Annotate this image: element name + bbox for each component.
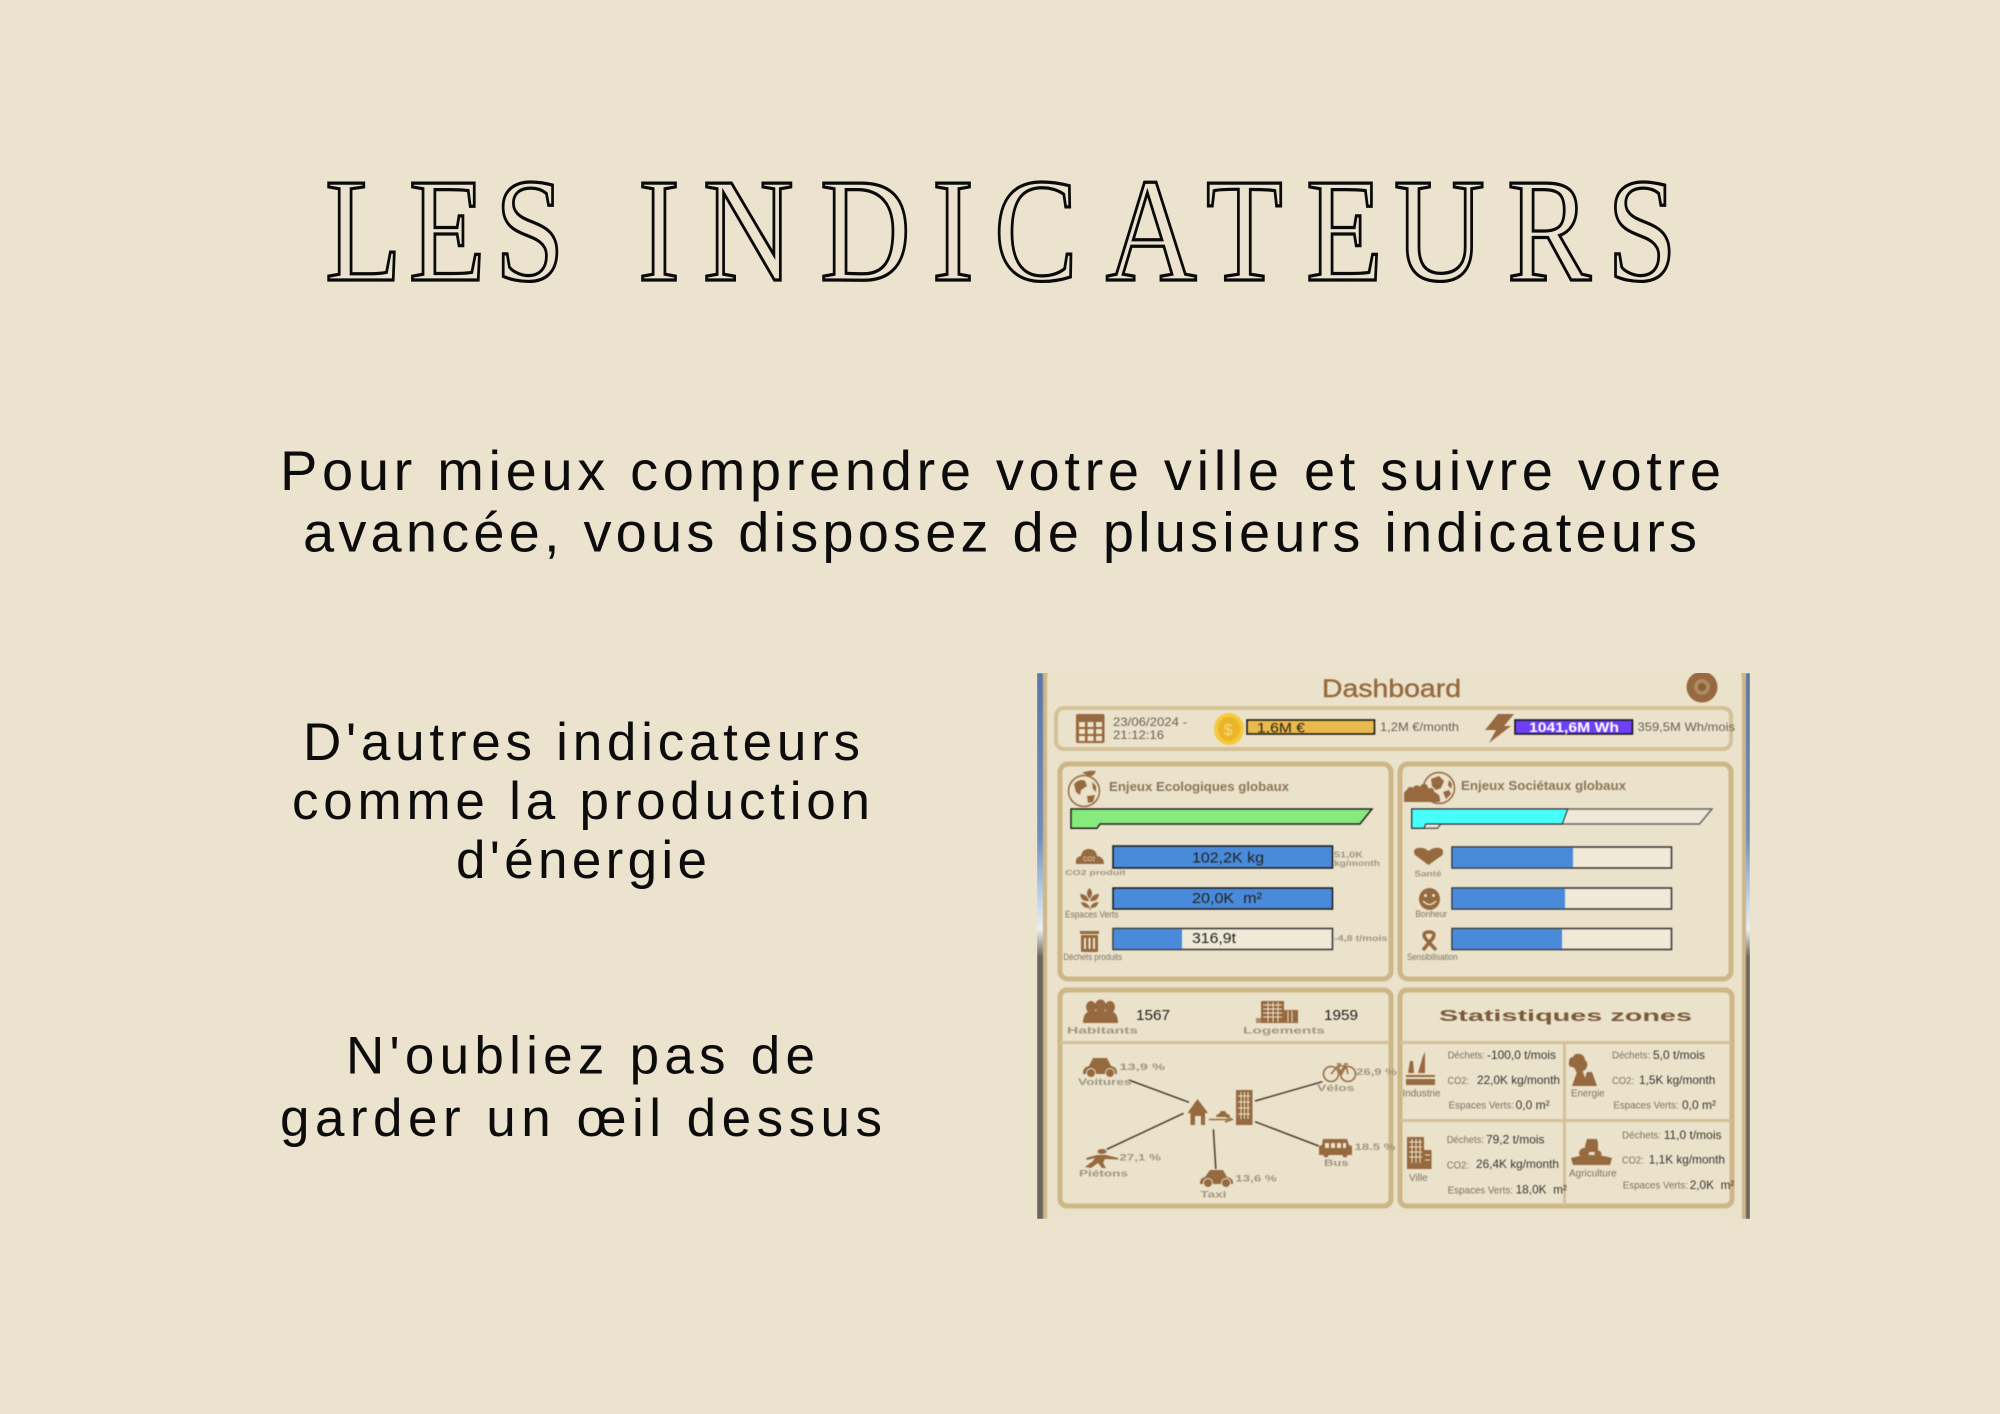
zone: industry: Industrie	[1402, 1089, 1441, 1100]
icon: calendar	[1076, 714, 1104, 743]
date and time	[1113, 716, 1187, 740]
mobility diagram	[1078, 1058, 1397, 1200]
monthly money: 1,2M €/month	[1380, 720, 1459, 734]
date and time: 23/06/2024 -	[1113, 715, 1187, 729]
mode: cars: 13,9 %	[1119, 1062, 1165, 1072]
mode: pedestrians	[1079, 1149, 1161, 1179]
zone: city: 26,4K kg/month	[1476, 1157, 1559, 1171]
bar: waste	[1113, 928, 1332, 950]
global gauge	[1071, 809, 1372, 828]
zone: energy: CO2:	[1612, 1076, 1634, 1087]
zone: agriculture: Déchets:	[1622, 1131, 1661, 1142]
money bar	[1247, 720, 1374, 736]
bar: waste: 316,9t	[1192, 930, 1237, 947]
dashboard screenshot	[1037, 660, 1750, 1219]
intro text: Pour mieux comprendre votre ville et suivre votre	[280, 439, 1721, 502]
icon: plant	[1080, 888, 1099, 910]
zone: industry	[1402, 1048, 1560, 1112]
zone: energy: 5,0 t/mois	[1653, 1048, 1705, 1062]
icon: trash	[1080, 931, 1099, 952]
zone: agriculture: Espaces Verts:	[1623, 1181, 1688, 1192]
zone: agriculture: 11,0 t/mois	[1664, 1128, 1722, 1142]
global gauge	[1412, 809, 1712, 828]
label: waste: Déchets produits	[1064, 952, 1122, 962]
zone: energy: Espaces Verts:	[1613, 1101, 1679, 1112]
icon: settings gear	[1686, 672, 1718, 702]
icon: coin: $	[1224, 722, 1232, 739]
mode: taxi	[1200, 1170, 1277, 1200]
zone: agriculture: Agriculture	[1569, 1169, 1617, 1180]
icon: house	[1188, 1099, 1208, 1125]
mode: bicycles: 26,9 %	[1356, 1067, 1397, 1077]
bar: happiness	[1452, 888, 1672, 909]
zone: city: Déchets:	[1447, 1135, 1484, 1146]
text: other indicators: d'énergie	[456, 831, 707, 890]
icon: CO2 cloud	[1076, 849, 1104, 864]
text: keep an eye	[280, 1026, 882, 1148]
mode: taxi: 13,6 %	[1235, 1174, 1277, 1184]
zone: agriculture: 1,1K kg/month	[1649, 1152, 1725, 1166]
zone: city	[1407, 1132, 1567, 1196]
zone: city: CO2:	[1447, 1160, 1469, 1171]
panel heading: Enjeux Sociétaux globaux	[1461, 779, 1626, 793]
date and time: 21:12:16	[1113, 728, 1164, 742]
mode: cars: Voitures	[1078, 1077, 1132, 1087]
zone: city: Espaces Verts:	[1448, 1185, 1513, 1196]
connector lines	[1107, 1080, 1322, 1169]
inhabitants count: 1567	[1136, 1007, 1170, 1024]
housing count: 1959	[1324, 1007, 1358, 1024]
label: health: Santé	[1414, 870, 1442, 879]
mode: bus: Bus	[1324, 1158, 1348, 1168]
mode: taxi: Taxi	[1200, 1190, 1226, 1200]
icon: commute arrow	[1209, 1111, 1232, 1122]
icon: smiley	[1419, 888, 1440, 910]
money bar: 1,6M €	[1257, 720, 1305, 736]
text: other indicators	[292, 713, 870, 890]
icon: CO2 cloud: CO2	[1083, 857, 1096, 863]
zone: energy	[1569, 1048, 1716, 1112]
panel: ecological issues	[1060, 764, 1391, 979]
intro text: avancée, vous disposez de plusieurs indicateurs	[303, 500, 1697, 564]
icon: ribbon	[1423, 932, 1436, 950]
zone: city: 79,2 t/mois	[1486, 1132, 1544, 1146]
bar: green spaces	[1113, 888, 1332, 909]
bar: green spaces: 20,0K m²	[1192, 890, 1262, 907]
icon: heart	[1414, 848, 1443, 865]
energy bar: 1041,6M Wh	[1529, 719, 1619, 735]
mode: pedestrians: Piétons	[1079, 1169, 1128, 1179]
text: other indicators: comme la production	[292, 772, 870, 831]
zone: energy: Déchets:	[1612, 1051, 1650, 1062]
zone: energy: Energie	[1571, 1089, 1605, 1100]
CO2 monthly: kg/month	[1334, 858, 1380, 868]
mode: bicycles: Vélos	[1317, 1083, 1354, 1093]
mode: bus: 18.5 %	[1354, 1142, 1396, 1152]
top status bar	[1056, 708, 1735, 749]
CO2 monthly	[1334, 850, 1380, 868]
CO2 monthly: 51,0K	[1334, 850, 1364, 860]
zone: industry: Espaces Verts:	[1449, 1101, 1514, 1112]
energy bar	[1515, 719, 1632, 735]
icon: tower	[1236, 1090, 1252, 1125]
zone: city: Ville	[1409, 1173, 1428, 1184]
zone: energy: 0,0 m²	[1682, 1098, 1716, 1112]
title: LES INDICATEURS	[325, 149, 1677, 312]
text: keep an eye: garder un œil dessus	[280, 1089, 882, 1148]
panel heading: Enjeux Ecologiques globaux	[1109, 780, 1289, 794]
panel: societal issues	[1400, 764, 1731, 979]
mode: bicycles	[1317, 1064, 1397, 1093]
icon: lightning	[1485, 714, 1514, 743]
icon: housing	[1256, 1001, 1298, 1023]
zone: agriculture: 2,0K m²	[1690, 1178, 1734, 1192]
bar: CO2: 102,2K kg	[1192, 850, 1264, 867]
zone: industry: 0,0 m²	[1516, 1098, 1550, 1112]
bar: CO2	[1113, 846, 1332, 868]
icon: inhabitants	[1083, 1000, 1118, 1023]
zone: city: 18,0K m²	[1516, 1182, 1567, 1196]
icon: coin	[1214, 713, 1244, 745]
panel: population and mobility	[1060, 990, 1397, 1206]
mode: bus	[1319, 1139, 1396, 1168]
panel heading: Statistiques zones	[1439, 1008, 1692, 1025]
mode: cars	[1078, 1058, 1165, 1087]
label: CO2: CO2 produit	[1065, 868, 1126, 877]
label: inhabitants: Habitants	[1067, 1026, 1138, 1036]
text: keep an eye: N'oubliez pas de	[346, 1026, 815, 1086]
zone: agriculture	[1569, 1128, 1734, 1192]
dashboard heading: Dashboard	[1322, 675, 1461, 703]
zone: energy: 1,5K kg/month	[1639, 1073, 1715, 1087]
zone: industry: -100,0 t/mois	[1487, 1048, 1556, 1062]
icon: people and earth	[1404, 772, 1454, 804]
label: housing: Logements	[1243, 1026, 1325, 1036]
panel: zone statistics	[1400, 990, 1734, 1206]
text: other indicators: D'autres indicateurs	[303, 713, 860, 772]
label: awareness: Sensibilisation	[1407, 952, 1458, 962]
zone: industry: 22,0K kg/month	[1477, 1073, 1560, 1087]
icon: earth with leaf	[1068, 771, 1100, 806]
monthly energy: 359,5M Wh/mois	[1638, 720, 1735, 734]
zone: agriculture: CO2:	[1622, 1155, 1644, 1166]
zone: industry: Déchets:	[1448, 1051, 1485, 1062]
mode: pedestrians: 27,1 %	[1119, 1153, 1161, 1163]
zone: industry: CO2:	[1448, 1076, 1469, 1087]
waste monthly: -4,8 t/mois	[1334, 933, 1388, 943]
label: green spaces: Espaces Verts	[1065, 909, 1119, 919]
bar: health	[1452, 847, 1672, 868]
label: happiness: Bonheur	[1416, 909, 1447, 919]
bar: awareness	[1452, 928, 1672, 950]
intro text	[280, 439, 1721, 564]
